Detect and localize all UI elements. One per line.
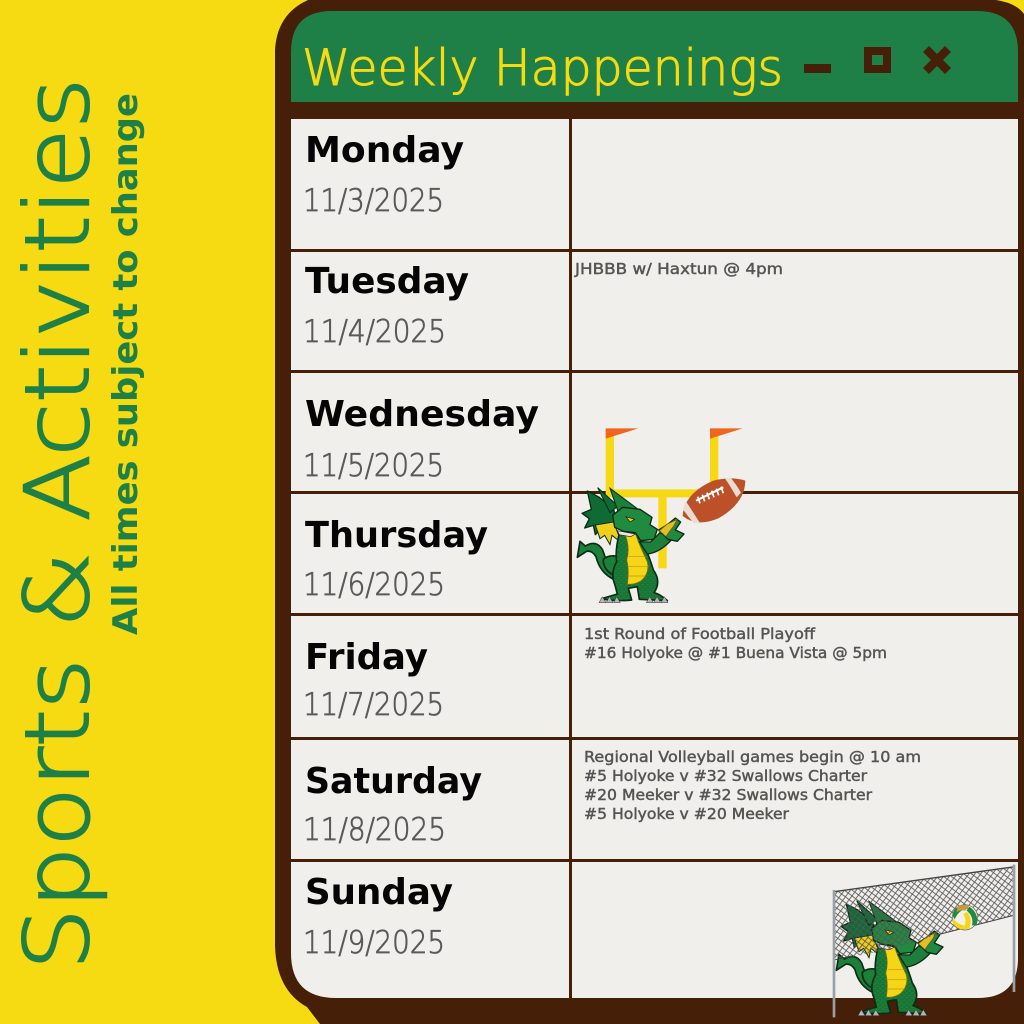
row: Tuesday: 11/4/2025	[303, 314, 446, 350]
icon: dragon	[836, 901, 943, 1016]
icon: goalpost	[606, 428, 743, 568]
row: Saturday: Regional Volleyball games begin @ 10 am	[584, 748, 921, 766]
row: Sunday: Sunday	[305, 872, 453, 913]
panel: schedule table	[291, 119, 1018, 998]
row: Friday: 1st Round of Football Playoff	[584, 625, 816, 643]
window frame	[275, 0, 1024, 1024]
window title bar	[291, 11, 1018, 102]
title: Weekly Happenings	[302, 39, 783, 97]
row: Friday	[291, 616, 1018, 737]
row: Sunday: 11/9/2025	[303, 925, 445, 961]
row: Tuesday: Tuesday	[305, 261, 469, 302]
row: Saturday: 11/8/2025	[303, 812, 446, 848]
illustration: volleyball dragon with net	[833, 865, 1015, 1017]
row: Saturday: #5 Holyoke v #32 Swallows Charter	[584, 767, 868, 785]
icon: minimize	[804, 64, 831, 73]
illustration: football dragon with goalpost	[577, 428, 745, 603]
row: Saturday: #5 Holyoke v #20 Meeker	[584, 805, 790, 823]
row: Thursday: Thursday	[305, 515, 488, 556]
row: Friday: Friday	[305, 637, 428, 678]
row: Wednesday: 11/5/2025	[303, 448, 444, 484]
row: Wednesday: Wednesday	[305, 394, 539, 435]
icon: volleyball	[952, 905, 978, 930]
side note: All times subject to change	[106, 93, 146, 635]
row: Saturday: Saturday	[305, 761, 482, 802]
icon: dragon	[577, 488, 684, 603]
icon: close	[923, 46, 951, 74]
icon: football	[683, 478, 745, 523]
icon: maximize	[864, 47, 891, 73]
row: Thursday	[291, 494, 1018, 613]
row: Tuesday: JHBBB w/ Haxtun @ 4pm	[574, 260, 783, 278]
side title: Sports & Activities	[6, 78, 109, 970]
row: Monday: Monday	[305, 130, 464, 171]
row: Thursday: 11/6/2025	[303, 567, 445, 603]
row: Tuesday	[291, 252, 1018, 370]
row: Saturday: #20 Meeker v #32 Swallows Charter	[584, 786, 873, 804]
row: Wednesday	[291, 373, 1018, 491]
row: Friday: 11/7/2025	[303, 687, 444, 723]
row: Friday: #16 Holyoke @ #1 Buena Vista @ 5pm	[584, 644, 887, 662]
row: Monday	[291, 119, 1018, 249]
row: Sunday	[291, 862, 1018, 998]
row: Monday: 11/3/2025	[303, 183, 444, 219]
row: Saturday	[291, 740, 1018, 859]
icon: volleyball net	[833, 865, 1015, 1017]
